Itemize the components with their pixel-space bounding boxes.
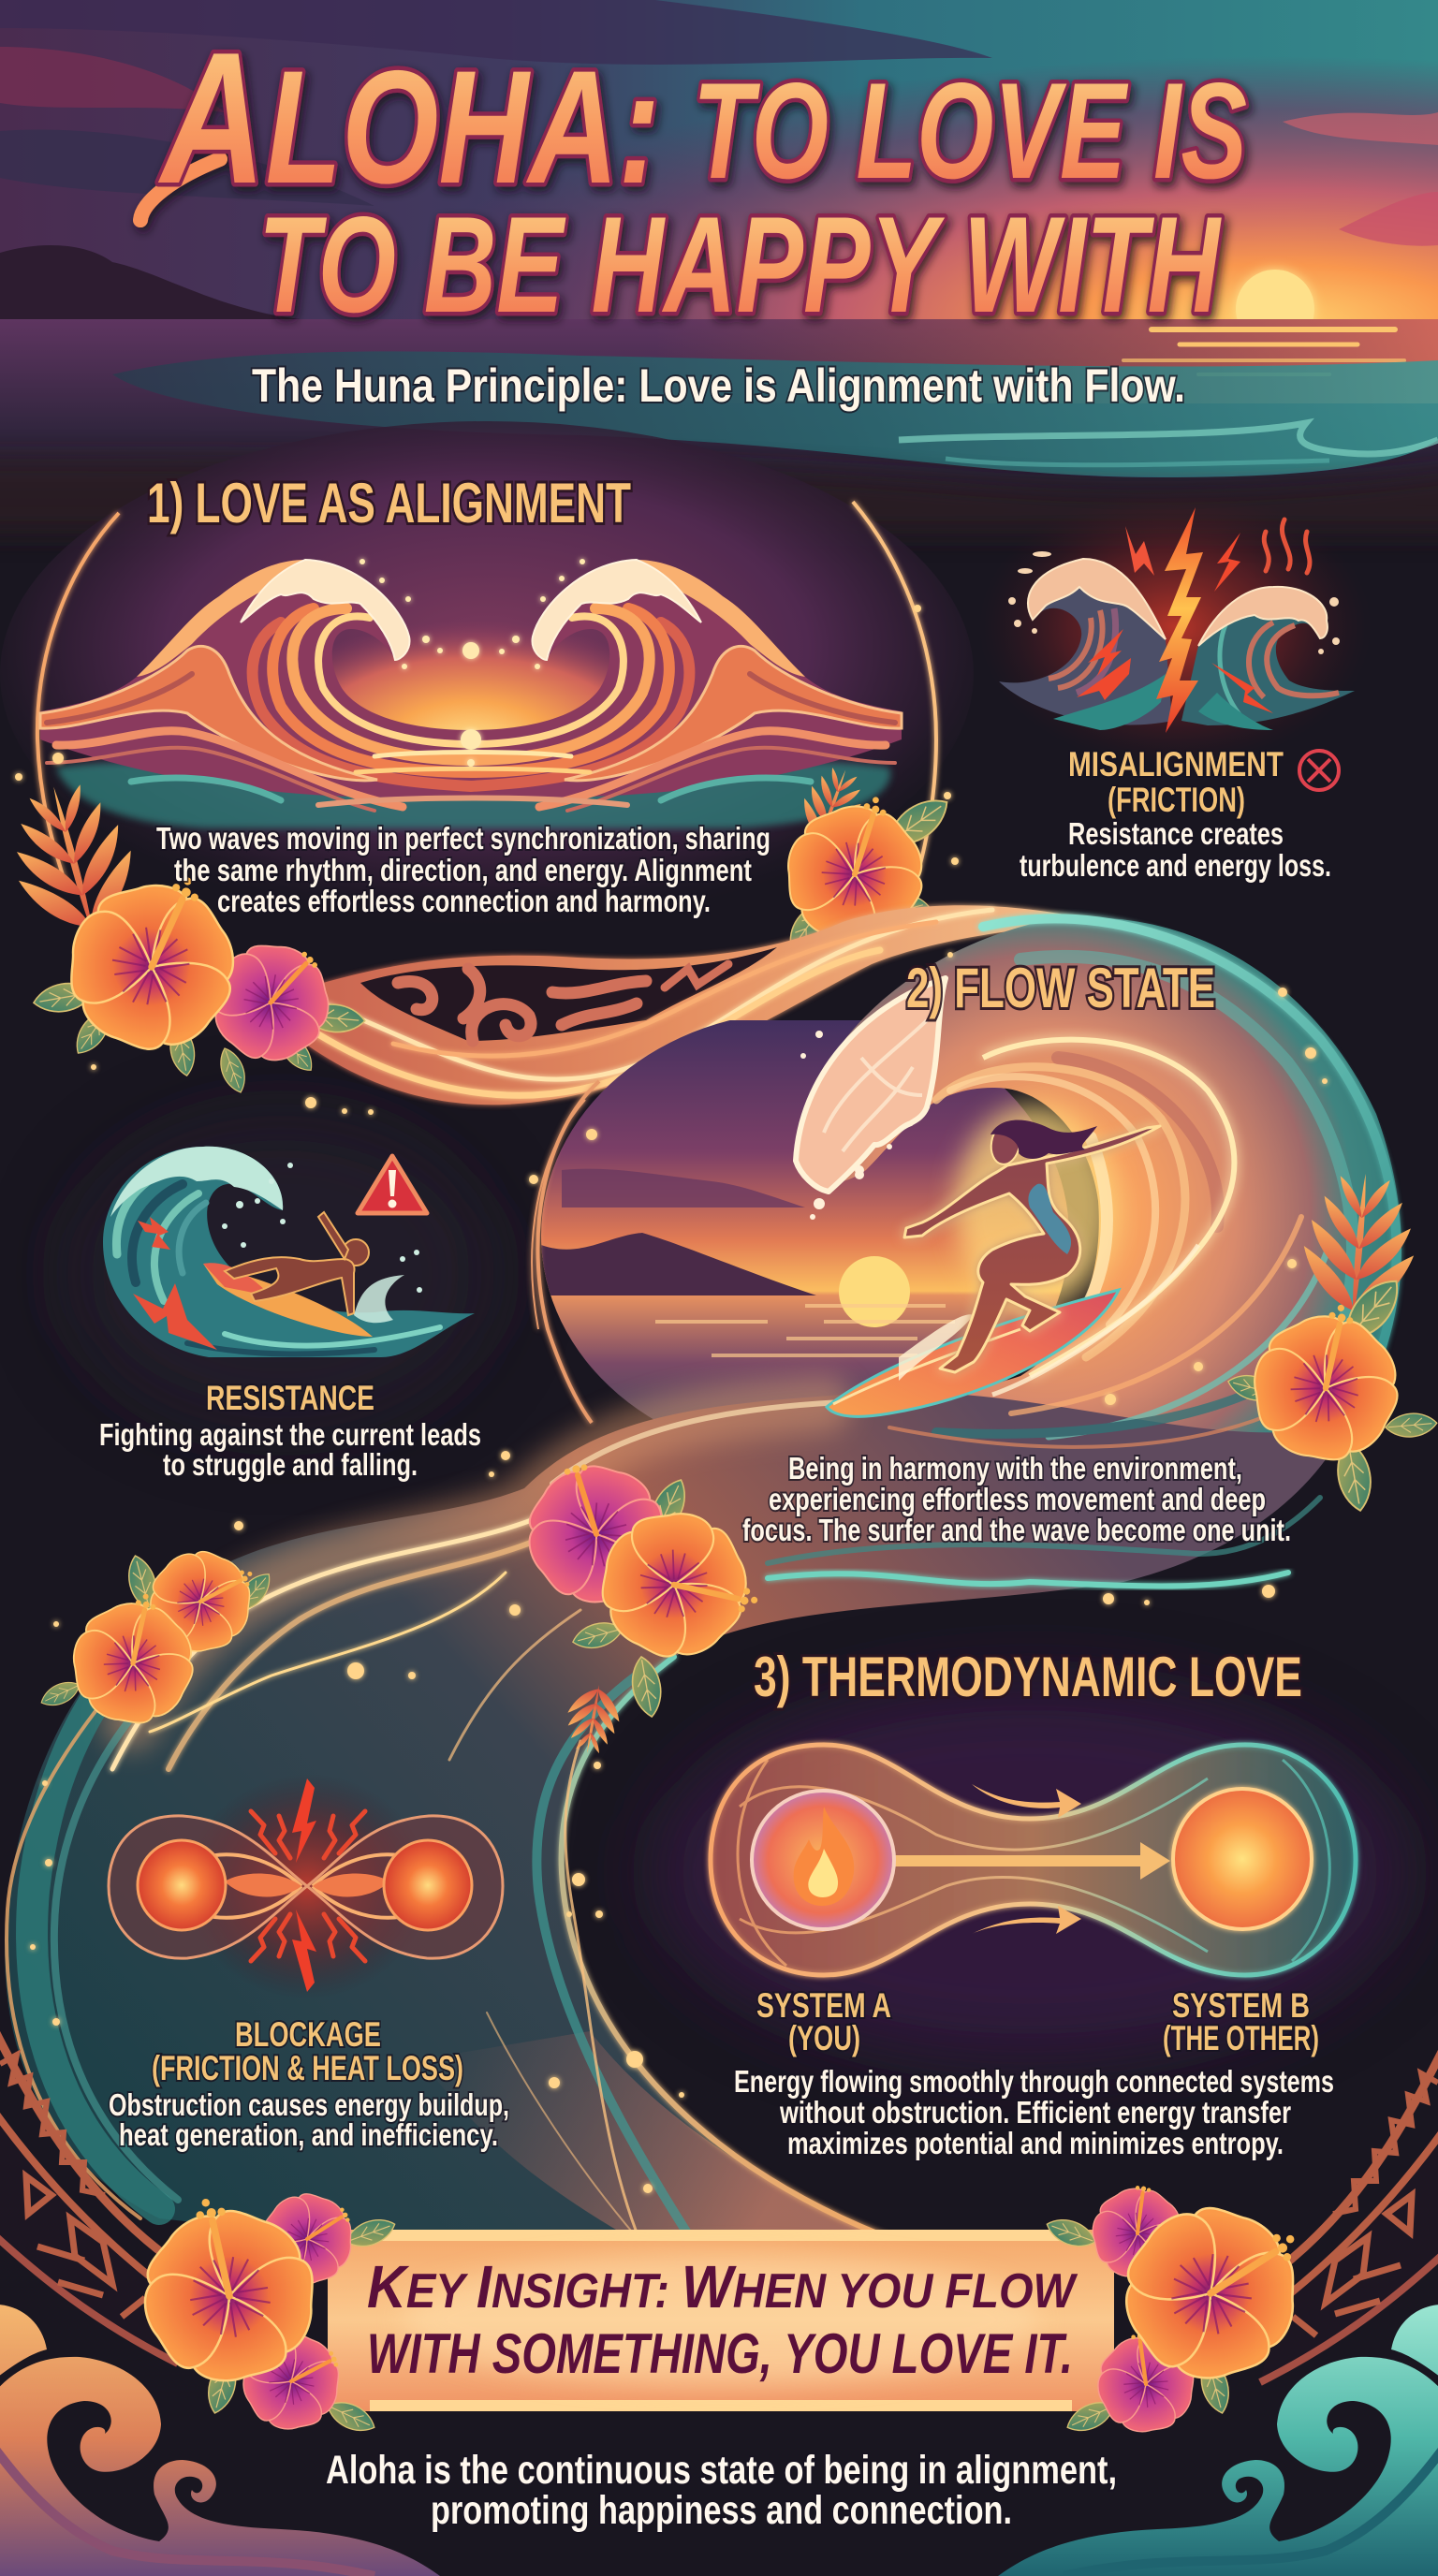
label: system B: (THE OTHER) — [1163, 2019, 1319, 2057]
foam curtain — [796, 978, 946, 1192]
text: alignment description: creates effortless connection and harmony. — [217, 884, 711, 918]
head — [988, 1121, 1023, 1166]
panel: love as alignment waves — [0, 421, 974, 927]
flower cluster: alignment right — [764, 760, 956, 968]
foam droplets — [1008, 551, 1340, 654]
text: blockage: BLOCKAGE — [235, 2015, 381, 2054]
sky — [0, 0, 1438, 348]
text: energy description: maximizes potential and minimizes entropy. — [787, 2126, 1284, 2160]
panel: blockage — [109, 1774, 503, 1998]
title line 1b: TO LOVE IS — [693, 54, 1247, 207]
panel: resistance wave — [103, 1147, 475, 1357]
text: closing: Aloha is the continuous state of being in alignment, — [326, 2448, 1117, 2493]
flower cluster: lower left — [37, 1530, 277, 1749]
label: system A — [756, 1986, 891, 2057]
text: key insight — [367, 2253, 1078, 2385]
swirl bottom right — [998, 2305, 1438, 2576]
flame — [794, 1807, 854, 1906]
flowers: banner left — [101, 2168, 399, 2455]
text: flow description: focus. The surfer and the wave become one unit. — [742, 1513, 1291, 1547]
system B ball — [1173, 1789, 1312, 1929]
text: key insight: WITH SOMETHING, YOU LOVE IT. — [367, 2322, 1073, 2385]
system A ball — [752, 1791, 894, 1929]
curl bands — [116, 1170, 440, 1354]
red burst — [185, 1774, 429, 1998]
panel: misalignment waves — [978, 487, 1372, 768]
surfboard — [827, 1290, 1119, 1416]
center arrow — [894, 1842, 1170, 1880]
text: flow description: experiencing effortless movement and deep — [769, 1482, 1266, 1516]
teal water — [56, 762, 890, 828]
small bolts — [1077, 526, 1273, 713]
banner bottom bar — [370, 2400, 1072, 2411]
text: resistance: to struggle and falling. — [163, 1447, 418, 1482]
ribbon: tribal flow — [281, 905, 1101, 1105]
swell lines — [889, 1217, 1329, 1447]
title line 1a: ALOHA: — [157, 14, 660, 223]
curl body — [103, 1147, 475, 1357]
bursts up and down — [292, 1778, 316, 1992]
sunset disc — [541, 1020, 1069, 1419]
text: resistance — [99, 1379, 481, 1482]
stream: lower flow and left swirl — [5, 1217, 1348, 2242]
hair — [990, 1120, 1097, 1159]
text: alignment description — [156, 821, 770, 918]
wave disc — [0, 421, 974, 927]
left energy ball — [138, 1840, 226, 1930]
red glow — [978, 487, 1372, 768]
foam crest — [110, 1147, 283, 1217]
splash — [222, 1163, 422, 1323]
flower cluster: center — [497, 1433, 770, 1758]
board — [203, 1264, 373, 1337]
banner: key insight — [328, 2230, 1114, 2411]
left wave — [40, 560, 471, 811]
top arrow — [972, 1784, 1081, 1818]
heat lines — [1264, 520, 1310, 573]
stream body — [5, 1392, 1348, 2242]
teal left band — [7, 1610, 178, 2218]
pinch lines — [201, 1854, 413, 1918]
tribal pattern — [360, 947, 777, 1041]
text: energy description: without obstruction. Efficient energy transfer — [779, 2095, 1291, 2130]
swirl bottom left — [0, 2305, 440, 2576]
panel: energy transfer — [711, 1745, 1356, 1975]
inner lines — [738, 1760, 1329, 1966]
connected bulbs — [711, 1745, 1356, 1975]
label: system A: (YOU) — [788, 2019, 860, 2057]
left crashing wave — [999, 559, 1172, 724]
text: flow description — [742, 1451, 1291, 1547]
main lightning bolt — [1156, 507, 1203, 733]
glow lines — [318, 910, 992, 1095]
tribal arc left — [0, 2022, 178, 2364]
foam droplets — [800, 1031, 892, 1220]
text: misalignment: turbulence and energy loss. — [1020, 848, 1331, 883]
text: blockage: heat generation, and inefficiency. — [119, 2117, 498, 2152]
label: system B: SYSTEM B — [1172, 1986, 1310, 2025]
right crashing wave — [1181, 587, 1355, 725]
bright arc — [983, 1040, 1234, 1376]
spray — [899, 1314, 974, 1381]
heading 2: 2) FLOW STATE — [906, 957, 1215, 1019]
flower cluster: flow state right — [1225, 1169, 1438, 1514]
right wave — [471, 560, 902, 811]
panel: flow state scene — [526, 1020, 1069, 1427]
text: alignment description: Two waves moving in perfect synchronization, sharing — [156, 821, 770, 856]
outer swell — [796, 917, 1401, 1474]
text: misalignment: MISALIGNMENT — [1068, 745, 1284, 783]
inner flame — [808, 1849, 838, 1897]
interior glow — [955, 1105, 1114, 1310]
text: misalignment: (FRICTION) — [1108, 781, 1245, 819]
concentric lines — [936, 1058, 1218, 1357]
banner body — [328, 2230, 1114, 2411]
right energy ball — [384, 1840, 472, 1930]
foam veins — [824, 1020, 927, 1151]
teal outer edge — [983, 918, 1397, 1385]
subtitle: The Huna Principle: Love is Alignment with Flow. — [252, 359, 1185, 412]
label: system B — [1163, 1986, 1319, 2057]
teal spikes — [1053, 674, 1273, 730]
disc rim — [532, 1081, 599, 1423]
heading 1: 1) LOVE AS ALIGNMENT — [147, 472, 631, 534]
warning triangle — [358, 1156, 427, 1213]
glowing particles — [15, 605, 1328, 2193]
peach streams — [112, 1402, 1320, 1769]
ribbon fill — [281, 905, 1101, 1105]
text: misalignment: Resistance creates — [1068, 816, 1284, 851]
stream glow — [889, 1851, 1161, 1871]
lower peach fade — [421, 2031, 899, 2242]
sea — [0, 319, 1438, 534]
wave: big curl around surfer — [796, 917, 1401, 1474]
text: flow description: Being in harmony with the environment, — [788, 1451, 1242, 1486]
sparkles — [360, 559, 585, 767]
fallen surfer — [225, 1212, 369, 1315]
banner bars — [370, 2230, 1072, 2241]
inner edge — [487, 1657, 899, 2242]
surfer — [827, 1120, 1198, 1416]
bottom arrow — [972, 1906, 1081, 1934]
text: key insight: KEY INSIGHT: WHEN YOU FLOW — [367, 2253, 1078, 2320]
body — [904, 1126, 1160, 1372]
swimsuit — [1028, 1184, 1071, 1254]
soft purple glows — [66, 1114, 1404, 2059]
text: energy description — [734, 2064, 1334, 2160]
label: system A: SYSTEM A — [756, 1986, 891, 2025]
bulbs — [109, 1816, 503, 1958]
center glow — [302, 585, 639, 763]
text: resistance: Fighting against the current leads — [99, 1417, 481, 1452]
text: blockage: (FRICTION & HEAT LOSS) — [152, 2049, 463, 2087]
tribal arc right — [1260, 2041, 1438, 2382]
text: misalignment — [1020, 745, 1331, 883]
swash — [140, 159, 220, 220]
title — [140, 14, 1247, 341]
disc rim — [37, 502, 936, 889]
banner glow — [403, 2254, 1039, 2385]
water lines — [131, 753, 811, 805]
text: blockage — [109, 2015, 509, 2152]
red bolts — [133, 1217, 217, 1350]
mountain silhouette — [0, 245, 300, 319]
text: closing: promoting happiness and connection. — [431, 2488, 1012, 2533]
text: resistance: RESISTANCE — [206, 1379, 374, 1417]
text: closing — [326, 2448, 1117, 2533]
flower cluster: left alignment — [0, 772, 366, 1096]
text: blockage: Obstruction causes energy buildup, — [109, 2087, 509, 2122]
icon: x in circle — [1299, 751, 1339, 790]
text: alignment description: the same rhythm, direction, and energy. Alignment — [174, 853, 752, 887]
flowers: banner right — [1043, 2173, 1333, 2460]
